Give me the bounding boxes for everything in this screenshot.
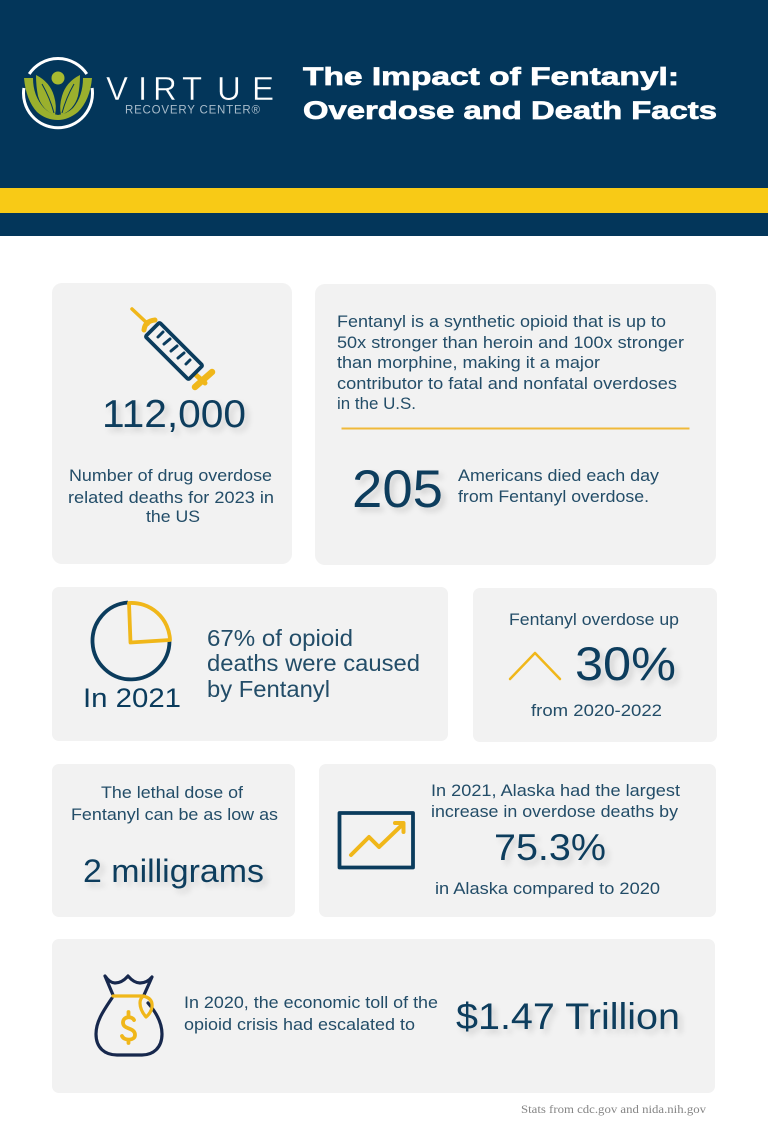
stat: 205: 205 — [352, 460, 443, 519]
text: daily deaths — [458, 466, 660, 506]
text: economic toll — [184, 993, 438, 1034]
text: overdose up: Fentanyl overdose up — [509, 610, 679, 629]
icon: rising line chart — [340, 813, 413, 868]
header band — [0, 0, 768, 236]
text: opioid death share: deaths were caused — [207, 650, 420, 676]
panel: overdose deaths 2023 — [52, 283, 292, 564]
title: The Impact of Fentanyl: — [303, 63, 679, 91]
title — [303, 63, 717, 125]
stat: 75.3%: 75.3% — [494, 827, 606, 868]
panel: economic toll — [52, 939, 715, 1093]
panel: lethal dose — [52, 764, 295, 917]
stat: 30%: 30% — [575, 637, 676, 690]
text: overdose description: related deaths for 2023 in — [68, 488, 274, 507]
text: overdose description: Number of drug overdose — [69, 466, 272, 485]
logo: Virtue Recovery Center: VIRTUE — [106, 70, 274, 107]
text: economic toll: opioid crisis had escalated to — [184, 1015, 415, 1034]
stat: 2 milligrams: 2 milligrams — [83, 853, 264, 889]
text: opioid death share: by Fentanyl — [207, 676, 330, 702]
text: lethal dose description: The lethal dose of — [101, 783, 243, 802]
text: overdose description: the US — [146, 507, 200, 526]
icon: syringe — [132, 309, 212, 387]
text: opioid death share — [207, 625, 420, 702]
text: overdose description — [68, 466, 274, 526]
text: economic toll: In 2020, the economic toll of the — [184, 993, 438, 1012]
text: date range: from 2020-2022 — [531, 701, 662, 720]
text: fentanyl description: 50x stronger than heroin and 100x stronger — [337, 333, 684, 352]
text: Alaska comparison: in Alaska compared to 2020 — [435, 879, 660, 898]
text: lethal dose description: Fentanyl can be as low as — [71, 805, 278, 824]
icon: pie chart — [93, 602, 170, 679]
text: opioid death share: 67% of opioid — [207, 625, 353, 651]
label: In 2021: In 2021 — [83, 683, 181, 713]
text: fentanyl description: in the U.S. — [337, 394, 416, 413]
stat: 112,000: 112,000 — [102, 393, 246, 436]
panel: overdose up 30 percent — [473, 588, 717, 742]
text: Alaska increase — [431, 781, 680, 821]
logo: Virtue Recovery Center — [23, 58, 274, 128]
text: Alaska increase: increase in overdose deaths by — [431, 802, 679, 821]
panel: 67 percent — [52, 587, 448, 741]
panel: fentanyl definition — [315, 284, 716, 565]
text: fentanyl description: contributor to fatal and nonfatal overdoses — [337, 374, 677, 393]
icon: money bag — [96, 976, 162, 1055]
text: Alaska increase: In 2021, Alaska had the largest — [431, 781, 680, 800]
panel: Alaska — [319, 764, 716, 917]
text: lethal dose description — [71, 783, 278, 824]
title: Overdose and Death Facts — [303, 97, 717, 125]
logo: Virtue Recovery Center: RECOVERY CENTER® — [125, 104, 261, 116]
text: daily deaths: from Fentanyl overdose. — [458, 487, 649, 506]
source note: Stats from cdc.gov and nida.nih.gov — [521, 1102, 706, 1116]
text: fentanyl description: Fentanyl is a synthetic opioid that is up to — [337, 312, 666, 331]
text: daily deaths: Americans died each day — [458, 466, 660, 485]
stat: $1.47 Trillion: $1.47 Trillion — [456, 996, 680, 1037]
text: fentanyl description — [337, 312, 684, 413]
icon: up chevron — [510, 653, 560, 679]
text: fentanyl description: than morphine, making it a major — [337, 353, 600, 372]
